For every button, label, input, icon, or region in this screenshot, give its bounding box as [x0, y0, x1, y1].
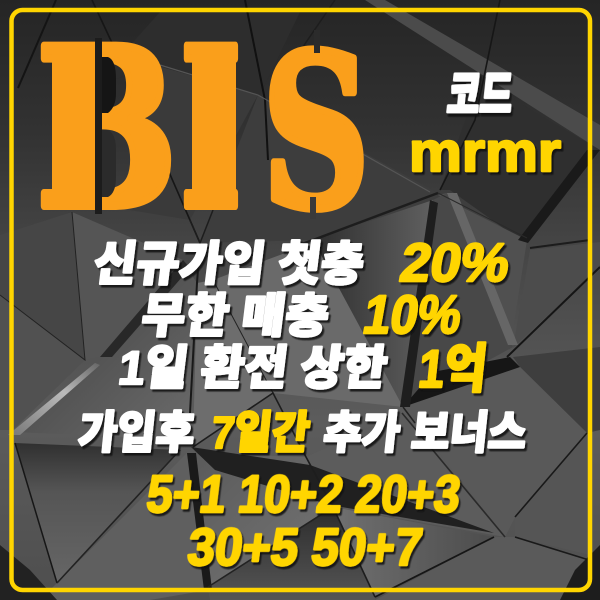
logo: BIS: I [180, 0, 242, 258]
text: daily withdrawal limit [116, 339, 490, 399]
text: 7-day extra bonus heading [76, 408, 529, 459]
text: unlimited deposit bonus [139, 284, 467, 345]
text: daily withdrawal limit: 1억 [416, 339, 490, 399]
text: unlimited deposit bonus: 10% [359, 284, 467, 345]
text: code value mrmr: mrmr [409, 120, 561, 183]
text: bonus list row 2: 30+5 50+7 [185, 519, 426, 577]
text: daily withdrawal limit: 1일 환전 상한 [116, 342, 390, 395]
text: bonus list row 1: 5+1 10+2 20+3 [144, 466, 464, 524]
logo: BIS: B [36, 1, 177, 259]
text: signup first deposit bonus: 20% [396, 232, 515, 293]
logo: BIS: S [262, 9, 370, 257]
text: signup first deposit bonus: 신규가입 첫충 [91, 238, 367, 291]
text: 7-day extra bonus heading: 가입후 [76, 408, 197, 459]
text: signup first deposit bonus [91, 232, 515, 293]
text: unlimited deposit bonus: 무한 매충 [139, 290, 332, 343]
text: 7-day extra bonus heading: 7일간 [209, 408, 312, 459]
logo: BIS [36, 0, 370, 259]
text: 7-day extra bonus heading: 추가 보너스 [321, 408, 529, 459]
text: code label: 코드 [445, 68, 516, 123]
